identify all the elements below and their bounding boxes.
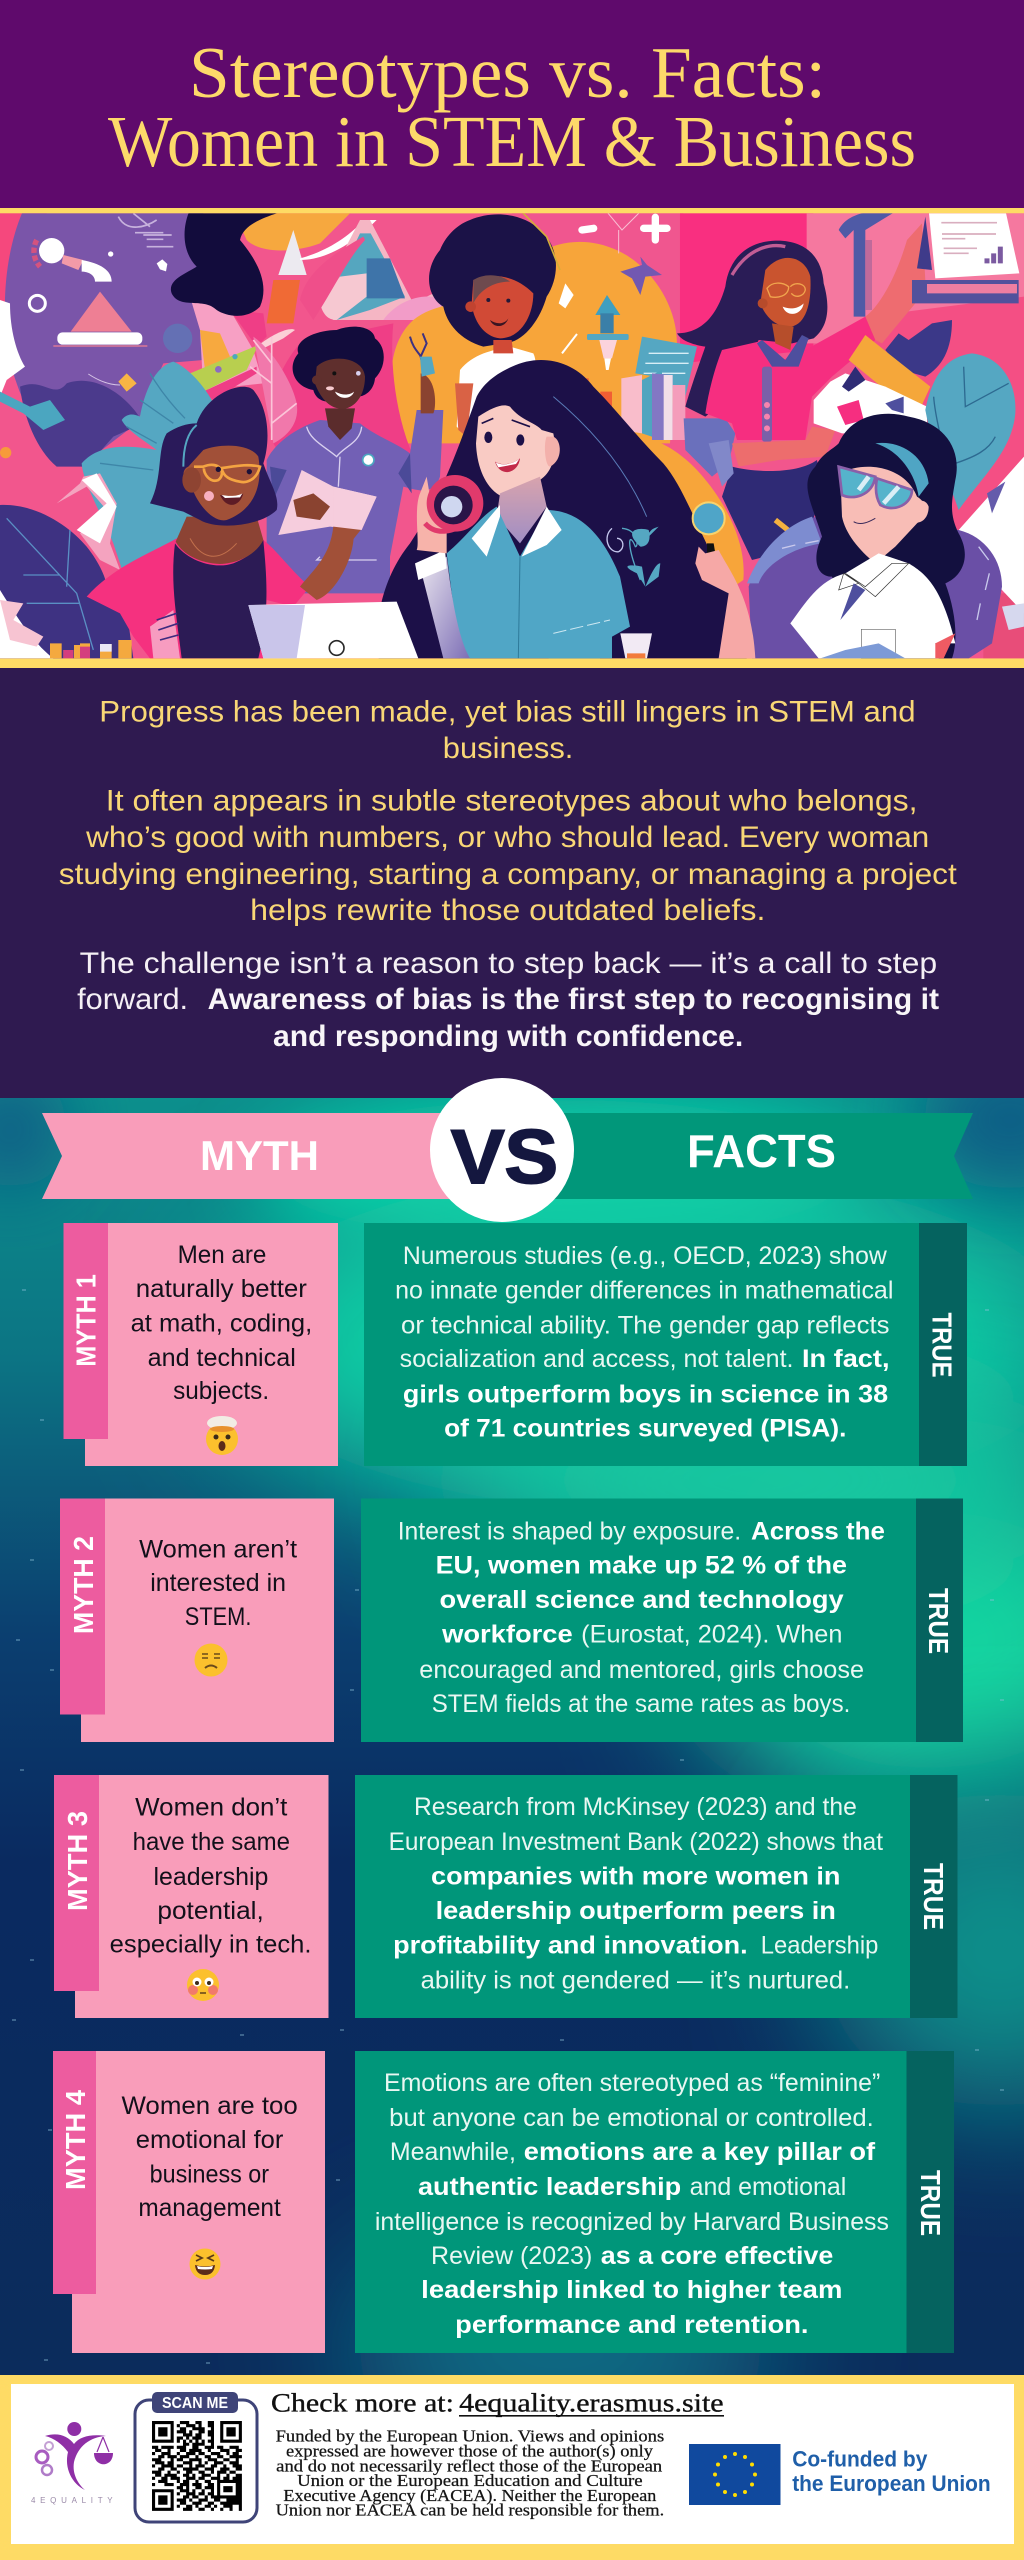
woman top right	[677, 223, 925, 560]
fact 3 panel: European Investment Bank (2022) shows that	[389, 1828, 883, 1856]
fact 4 panel: Review (2023)	[431, 2242, 592, 2270]
myth 4 row	[53, 2051, 954, 2353]
QR code: SCAN ME	[162, 2395, 228, 2412]
fact 3 panel: TRUE	[918, 1863, 949, 1930]
intro paragraph: call to step forward: Awareness of bias is the first step to recognising it	[208, 983, 939, 1016]
EU flag	[689, 2444, 780, 2505]
fact 4 panel: authentic leadership	[418, 2173, 681, 2201]
myth 4 card: emotional for	[136, 2126, 283, 2154]
intro paragraph: call to step forward: and responding with confidence.	[273, 1020, 743, 1053]
intro paragraph: progress: business.	[443, 732, 573, 765]
myth 3 card: MYTH 3	[62, 1811, 93, 1911]
disclaimer text: Union nor EACEA can be held responsible for them.	[276, 2500, 664, 2520]
fact 4 panel: leadership linked to higher team	[421, 2276, 842, 2304]
fact 1 panel: TRUE	[926, 1312, 958, 1378]
check more link: Check more at:	[271, 2388, 454, 2418]
fact 1 panel: girls outperform boys in science in 38	[403, 1380, 888, 1408]
orange circle	[391, 242, 677, 443]
woman with glasses	[87, 387, 377, 658]
myth 2 row	[60, 1498, 963, 1742]
fact 1 panel: socialization and access, not talent.	[400, 1345, 794, 1373]
pink leaf and magenta behind afro	[270, 324, 410, 454]
purple blob	[5, 210, 203, 467]
title band	[0, 0, 1024, 208]
fact 1 panel: Numerous studies (e.g., OECD, 2023) show	[403, 1242, 888, 1270]
intro paragraph: progress	[99, 696, 916, 765]
myth 1 card: and technical	[148, 1344, 296, 1372]
intro paragraph: call to step forward: forward.	[77, 983, 188, 1016]
left background	[0, 210, 47, 303]
fact 3 panel: Research from McKinsey (2023) and the	[414, 1793, 857, 1821]
fact 2 panel: (Eurostat, 2024). When	[581, 1620, 842, 1648]
intro panel	[0, 668, 1024, 1098]
check more link	[271, 2388, 724, 2418]
myth 1 row	[64, 1223, 967, 1466]
intro paragraph: subtle stereotypes: helps rewrite those outdated beliefs.	[250, 894, 765, 927]
footer	[0, 2375, 1024, 2560]
myth 1 card: at math, coding,	[131, 1310, 312, 1338]
myth 2 card	[60, 1498, 334, 1742]
fact 3 panel: leadership outperform peers in	[436, 1897, 836, 1925]
icon: laughing emoji	[190, 2248, 220, 2280]
fact 4 panel: but anyone can be emotional or controlled.	[389, 2104, 874, 2132]
facts ribbon	[540, 1113, 973, 1199]
facts ribbon: FACTS	[687, 1125, 836, 1177]
fact 2 panel: overall science and technology	[440, 1586, 844, 1614]
vs circle	[430, 1078, 574, 1222]
woman with afro and purple shirt	[267, 327, 443, 593]
disclaimer text: Funded by the European Union. Views and opinions	[276, 2426, 664, 2446]
fact 1 panel: no innate gender differences in mathematical	[395, 1276, 893, 1304]
myth 1 card	[64, 1223, 338, 1466]
logo: 4equality: 4EQUALITY	[31, 2496, 117, 2505]
top orange and flask	[235, 213, 350, 250]
fact 2 panel: EU, women make up 52 % of the	[436, 1552, 847, 1580]
fact 3 panel: ability is not gendered — it’s nurtured.	[421, 1966, 850, 1994]
fact 2 panel	[361, 1498, 963, 1742]
myth 3 card: leadership	[154, 1863, 268, 1891]
icon: unamused emoji	[194, 1644, 228, 1676]
orange area items	[559, 210, 697, 440]
fact 4 panel	[355, 2051, 954, 2353]
top right scene	[839, 210, 1019, 317]
microscope	[29, 213, 192, 392]
fact 4 panel: TRUE	[915, 2170, 946, 2236]
teal starfield background	[0, 1050, 1024, 2460]
fact 3 panel: companies with more women in	[431, 1862, 840, 1890]
title	[108, 32, 916, 182]
disclaimer text: Union or the European Education and Culture	[297, 2471, 643, 2490]
fact 4 panel: Emotions are often stereotyped as “feminine”	[384, 2069, 880, 2097]
fact 2 panel: TRUE	[923, 1588, 954, 1654]
myth 3 row	[54, 1775, 958, 2018]
intro paragraph: progress: Progress has been made, yet bias still lingers in STEM and	[99, 696, 916, 728]
co-funded text: Co-funded by	[792, 2446, 928, 2472]
myth ribbon	[42, 1113, 460, 1199]
dark leaf	[0, 505, 133, 658]
myth ribbon: MYTH	[200, 1132, 319, 1179]
laptop	[248, 602, 418, 658]
fact 4 panel: performance and retention.	[455, 2311, 808, 2339]
fact 4 panel: as a core effective	[601, 2242, 833, 2270]
myth 2 card: MYTH 2	[68, 1536, 99, 1634]
fact 1 panel: or technical ability. The gender gap reflects	[401, 1312, 890, 1340]
title: Women in STEM & Business	[108, 101, 916, 182]
myth 3 card: potential,	[157, 1897, 264, 1925]
myth 4 card: MYTH 4	[60, 2090, 91, 2190]
icon: exploding head emoji	[206, 1416, 238, 1455]
intro paragraph: subtle stereotypes: who’s good with numbers, or who should lead. Every woman	[85, 821, 929, 854]
co-funded text: the European Union	[792, 2471, 991, 2496]
centre woman	[377, 360, 747, 658]
disclaimer text	[276, 2426, 664, 2520]
myth 3 card	[54, 1775, 328, 2018]
disclaimer text: Executive Agency (EACEA). Neither the European	[283, 2486, 656, 2505]
co-funded text	[792, 2446, 991, 2496]
disclaimer text: expressed are however those of the author(s) only	[286, 2442, 654, 2460]
myth 4 card: management	[138, 2194, 281, 2222]
fact 2 panel: Interest is shaped by exposure.	[398, 1518, 741, 1546]
title: Stereotypes vs. Facts:	[189, 32, 826, 113]
myth 1 card: MYTH 1	[70, 1274, 102, 1367]
fact 4 panel: and emotional	[690, 2173, 846, 2201]
fact 4 panel: intelligence is recognized by Harvard Business	[375, 2208, 889, 2236]
teal leaves	[82, 362, 212, 568]
centre woman plant and magnifier	[549, 502, 755, 658]
myth 4 card: Women are too	[122, 2092, 298, 2120]
QR code	[135, 2392, 257, 2522]
disclaimer text: and do not necessarily reflect those of the European	[276, 2456, 662, 2476]
icon: flushed emoji	[187, 1969, 219, 2001]
myth 2 card: Women aren’t	[139, 1536, 297, 1564]
fact 4 panel: emotions are a key pillar of	[524, 2138, 876, 2166]
fact 1 panel: of 71 countries surveyed (PISA).	[444, 1414, 846, 1442]
fact 2 panel: encouraged and mentored, girls choose	[419, 1656, 864, 1684]
fact 3 panel	[355, 1775, 958, 2018]
intro paragraph: call to step forward: The challenge isn’t a reason to step back — it’s a call to step	[80, 947, 937, 980]
fact 1 panel: In fact,	[802, 1345, 890, 1373]
myth 3 card: Women don’t	[135, 1794, 287, 1822]
myth 3 card: especially in tech.	[110, 1930, 312, 1958]
books	[50, 640, 132, 658]
myth 1 card: subjects.	[173, 1377, 269, 1405]
intro paragraph: call to step forward	[77, 947, 939, 1053]
myth 3 card: have the same	[133, 1828, 290, 1856]
illustration: women in STEM and business	[0, 208, 1024, 668]
fact 2 panel: STEM fields at the same rates as boys.	[432, 1690, 850, 1718]
myth 2 card: interested in	[150, 1569, 286, 1597]
intro paragraph: subtle stereotypes	[59, 784, 957, 927]
intro paragraph: subtle stereotypes: studying engineering, starting a company, or managing a project	[59, 858, 957, 891]
fact 2 panel: Across the	[751, 1518, 885, 1546]
pink details lower left	[57, 473, 120, 570]
check more link: 4equality.erasmus.site	[459, 2388, 724, 2418]
woman with sunglasses	[790, 414, 965, 658]
fact 1 panel	[364, 1223, 967, 1466]
myth 4 card: business or	[150, 2160, 269, 2188]
woman in back top left	[171, 210, 295, 400]
woman top centre with big hair	[429, 210, 560, 437]
fact 3 panel: profitability and innovation.	[393, 1932, 748, 1960]
intro paragraph: subtle stereotypes: It often appears in subtle stereotypes about who belongs,	[106, 784, 918, 818]
logo: 4equality	[31, 2422, 117, 2505]
folder, box and leaves on the right	[747, 320, 1024, 658]
myth 4 card	[53, 2051, 325, 2353]
myth 2 card: STEM.	[185, 1603, 251, 1631]
myth 1 card: naturally better	[136, 1275, 307, 1303]
fact 3 panel: Leadership	[761, 1932, 878, 1960]
fact 2 panel: workforce	[441, 1620, 573, 1648]
banner: myth vs facts	[42, 1078, 973, 1222]
myth 1 card: Men are	[178, 1241, 266, 1269]
fact 4 panel: Meanwhile,	[390, 2138, 516, 2166]
vs circle: VS	[451, 1115, 558, 1200]
